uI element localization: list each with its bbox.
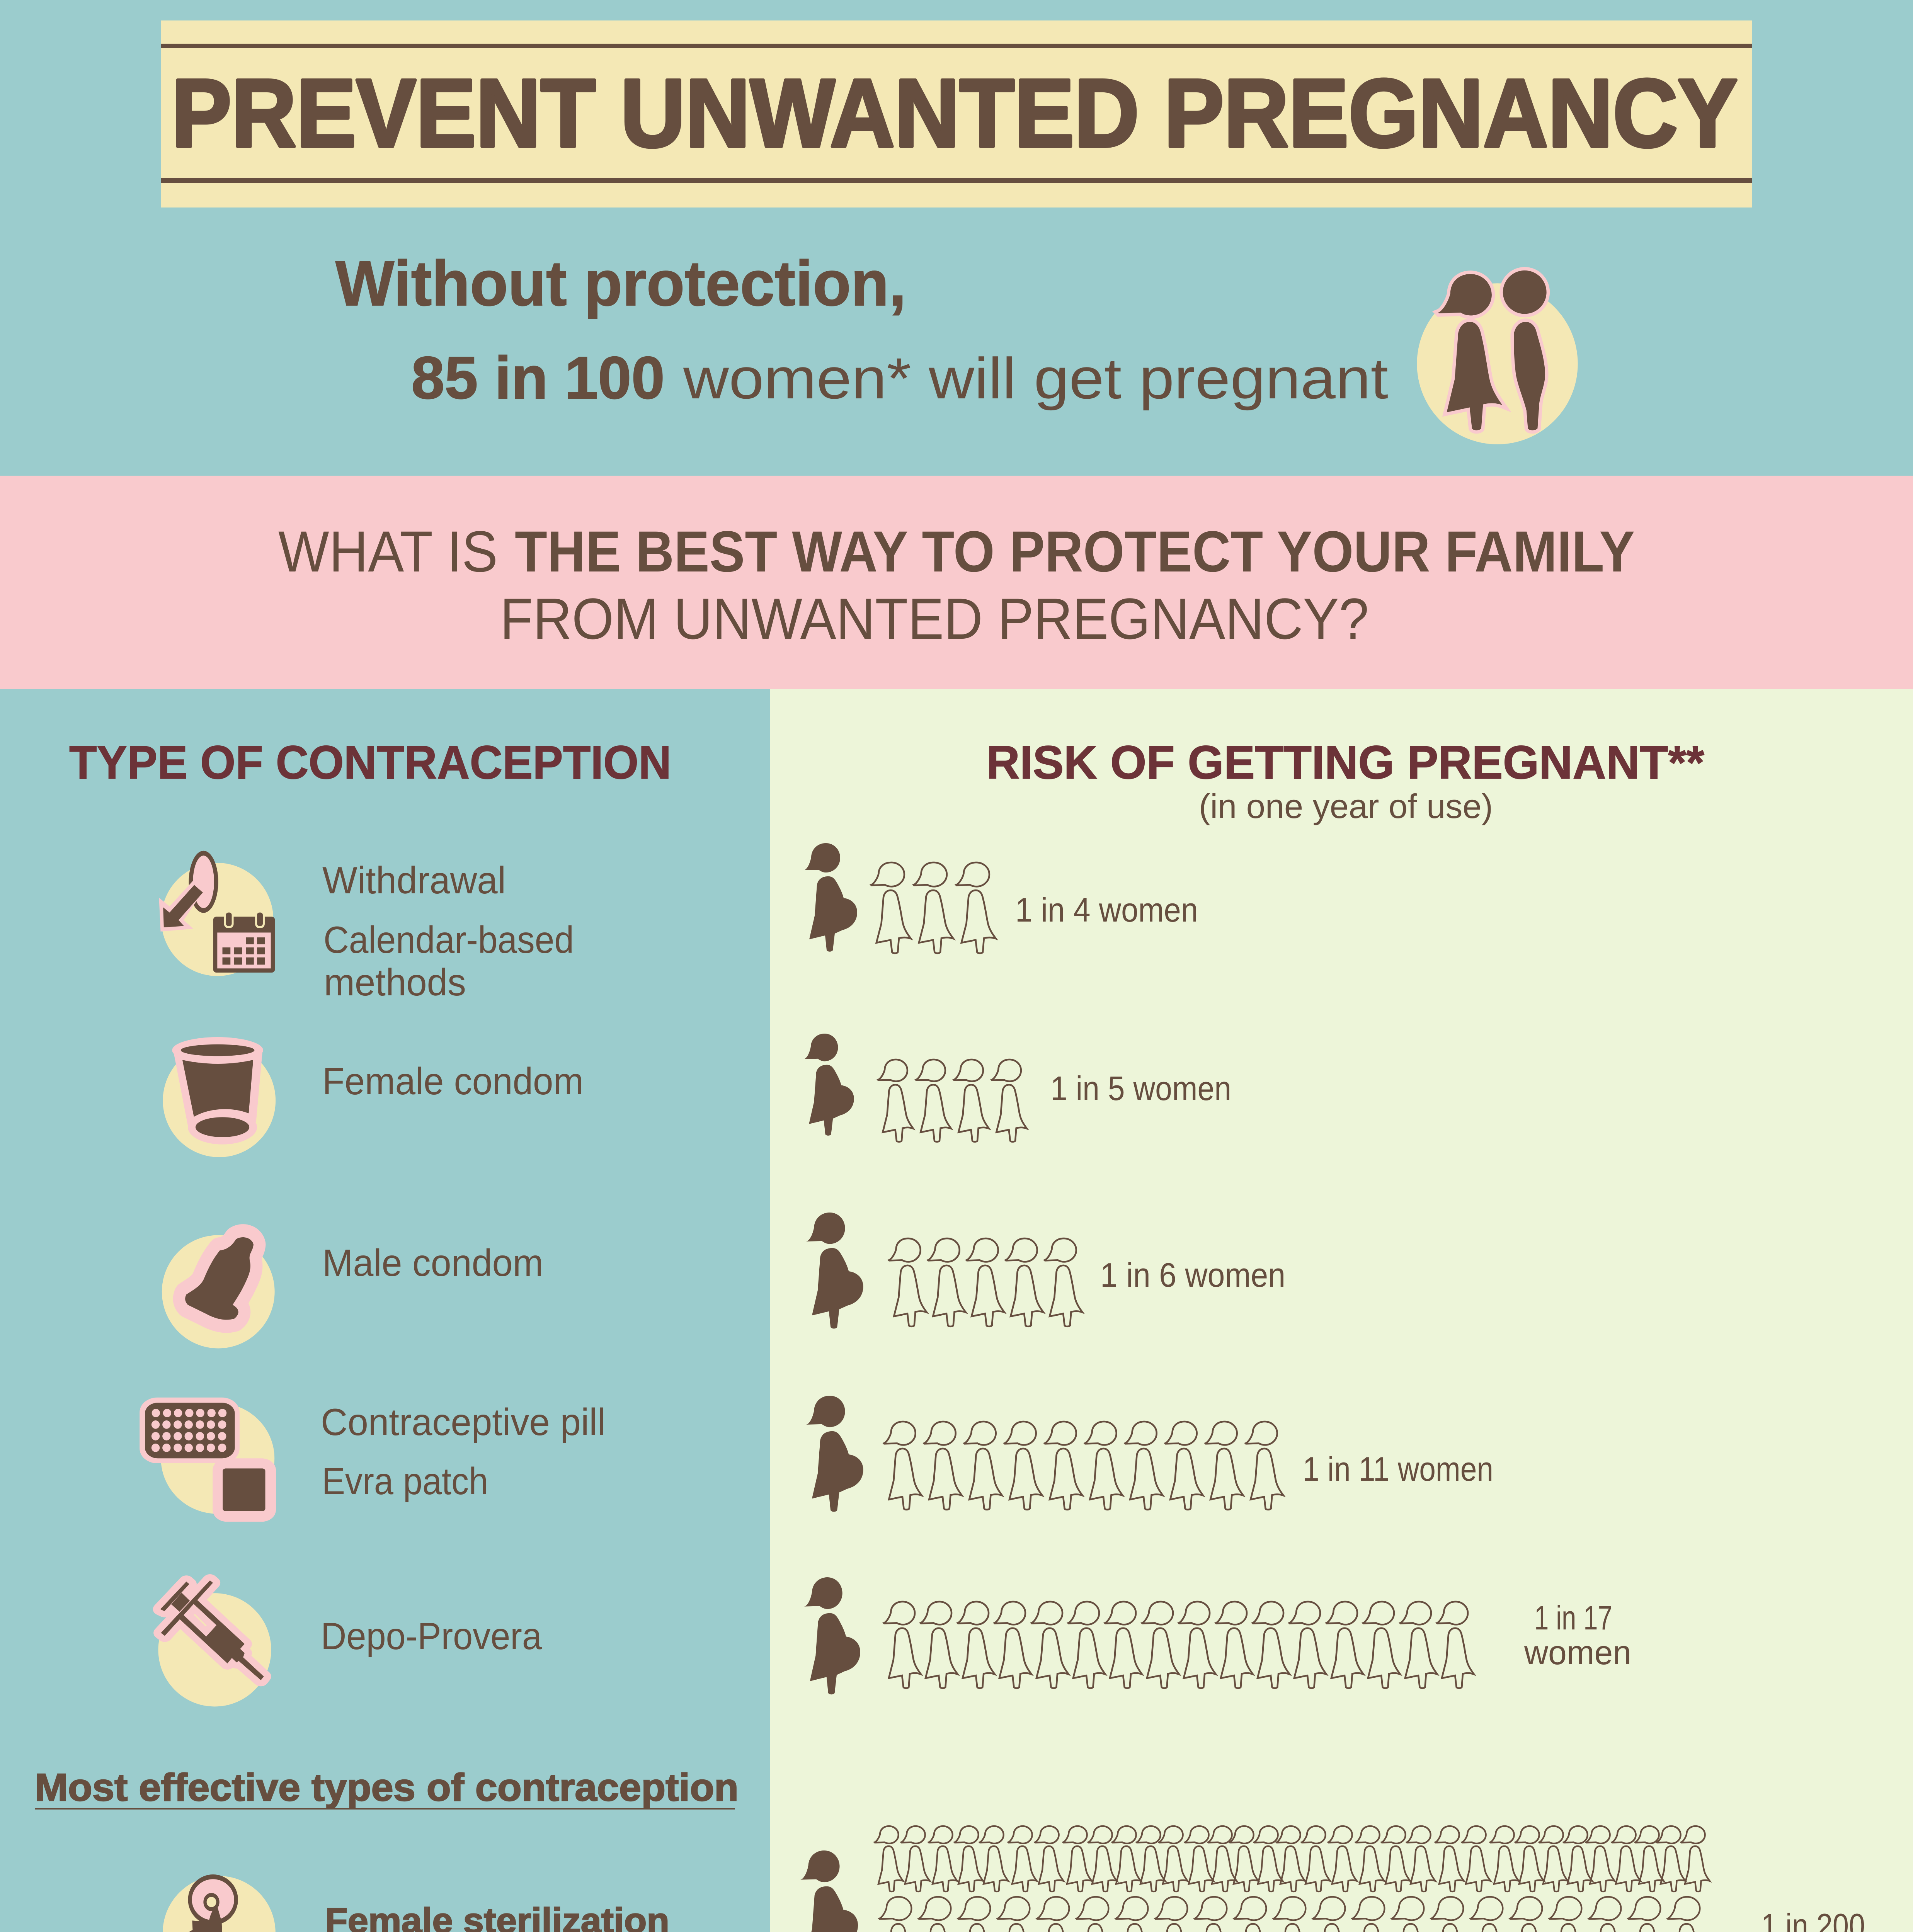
icon: female condom <box>163 1037 276 1157</box>
panel: question band <box>0 476 1913 689</box>
label: pill and patch: Contraceptive pill <box>321 1401 606 1443</box>
question heading: WHAT IS <box>278 519 498 584</box>
panel: risk of getting pregnant <box>795 736 1867 1932</box>
chart row: 1 in 6 women: 1 in 6 women <box>1100 1256 1285 1294</box>
heading: type of contraception: TYPE OF CONTRACEPTION <box>69 736 671 789</box>
label: withdrawal and calendar: methods <box>324 961 466 1003</box>
chart row: 1 in 17 women: 1 in 17 <box>1534 1599 1612 1637</box>
title: PREVENT UNWANTED PREGNANCY <box>172 59 1738 167</box>
subtitle line one: Without protection, <box>335 248 906 319</box>
question heading <box>278 519 1635 651</box>
icon: couple <box>1417 270 1578 444</box>
question heading: FROM UNWANTED PREGNANCY? <box>500 586 1369 651</box>
heading: most effective types: Most effective types of contraception <box>35 1766 739 1809</box>
subtitle line two: 85 in 100 <box>411 344 665 411</box>
question heading: THE BEST WAY TO PROTECT YOUR FAMILY <box>515 519 1635 584</box>
subtitle line two <box>411 344 1388 411</box>
label: withdrawal and calendar: Withdrawal <box>322 859 506 901</box>
panel: type of contraception <box>0 689 770 1932</box>
icon: male condom <box>162 1235 275 1349</box>
chart row: 1 in 11 women: 1 in 11 women <box>1303 1450 1493 1488</box>
chart row: 1 in 5 women <box>804 1034 1231 1142</box>
label: female condom: Female condom <box>322 1060 584 1102</box>
icon: pill pack and patch <box>140 1398 276 1522</box>
chart row: 1 in 17 women <box>804 1577 1631 1694</box>
chart row: 1 in 17 women: women <box>1524 1633 1631 1672</box>
subtitle line two: women* will get pregnant <box>683 346 1388 411</box>
label: withdrawal and calendar <box>322 859 574 1003</box>
label: withdrawal and calendar: Calendar-based <box>323 918 574 961</box>
label: depo-provera: Depo-Provera <box>321 1615 542 1657</box>
heading: risk of getting pregnant: RISK OF GETTING PREGNANT** <box>986 736 1705 789</box>
chart row: 1 in 5 women: 1 in 5 women <box>1050 1069 1231 1107</box>
label: male condom: Male condom <box>322 1242 543 1284</box>
icon: syringe <box>158 1580 271 1707</box>
chart row: 1 in 6 women <box>806 1213 1285 1328</box>
heading: risk of getting pregnant <box>986 736 1705 825</box>
chart row: 1 in 4 women <box>804 843 1198 953</box>
chart row: 1 in 11 women <box>806 1396 1493 1512</box>
icon: withdrawal and calendar <box>159 851 275 976</box>
label: pill and patch: Evra patch <box>322 1460 488 1502</box>
heading: risk of getting pregnant: (in one year of use) <box>1199 787 1493 825</box>
chart row: 1 in 200 women <box>800 1826 1867 1932</box>
title banner <box>161 20 1752 207</box>
chart row: 1 in 4 women: 1 in 4 women <box>1015 891 1198 929</box>
label: pill and patch <box>321 1401 606 1502</box>
icon: female sterilization <box>141 1876 276 1932</box>
panel: top header <box>0 0 1913 476</box>
